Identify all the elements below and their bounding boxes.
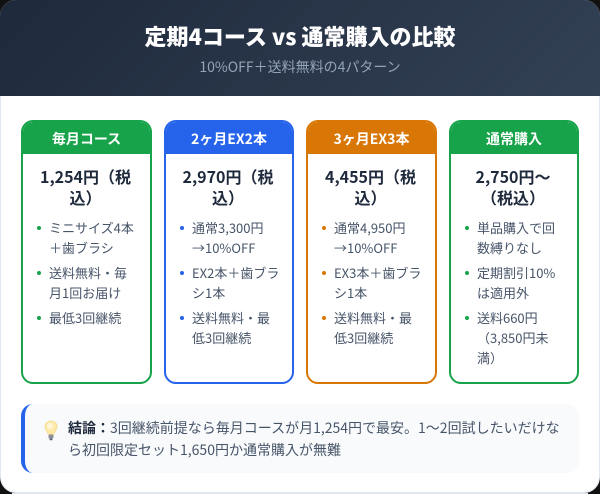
card header: 2ヶ月EX2本 xyxy=(166,122,292,154)
feature list: 送料660円 xyxy=(477,308,538,327)
feature list: シ1本 xyxy=(334,283,367,302)
feature list: 満） xyxy=(477,348,503,367)
card header: 2ヶ月EX2本: 2ヶ月EX2本 xyxy=(191,129,267,149)
conclusion text xyxy=(68,418,560,460)
price xyxy=(476,164,550,209)
price: 込） xyxy=(69,185,102,209)
subtitle: 10%OFF＋送料無料の4パターン xyxy=(199,57,401,77)
card header: 3ヶ月EX3本 xyxy=(308,122,435,154)
feature list: 数縛りなし xyxy=(477,238,542,257)
title: 定期4コース vs 通常購入の比較 xyxy=(145,20,455,52)
price xyxy=(325,164,416,209)
panel: 通常購入 xyxy=(449,120,579,384)
card header: 毎月コース: 毎月コース xyxy=(52,129,121,149)
card header: 3ヶ月EX3本: 3ヶ月EX3本 xyxy=(334,129,409,149)
feature list: （3,850円未 xyxy=(477,328,548,347)
feature list: 低3回継続 xyxy=(192,328,251,347)
feature list: 最低3回継続 xyxy=(49,308,121,327)
price: 2,750円〜 xyxy=(476,164,550,188)
feature list: 単品購入で回 xyxy=(477,218,555,237)
feature list xyxy=(465,218,555,367)
card header: 毎月コース xyxy=(23,122,150,154)
feature list xyxy=(322,218,421,347)
card header: 通常購入: 通常購入 xyxy=(486,129,542,149)
feature list: ミニサイズ4本 xyxy=(49,218,134,237)
icon: light bulb xyxy=(44,420,58,440)
feature list: シ1本 xyxy=(192,283,225,302)
conclusion text: ら初回限定セット1,650円か通常購入が無難 xyxy=(68,440,341,460)
panel: 3ヶ月EX3本 xyxy=(306,120,437,384)
panel: 2ヶ月EX2本 xyxy=(164,120,294,384)
feature list: 通常4,950円 xyxy=(334,218,405,237)
feature list: ＋歯ブラシ xyxy=(49,238,114,257)
feature list xyxy=(37,218,134,327)
feature list: 送料無料・最 xyxy=(334,308,412,327)
feature list: 低3回継続 xyxy=(334,328,393,347)
price: 2,970円（税 xyxy=(183,164,273,188)
price: 込） xyxy=(354,185,386,209)
feature list: は適用外 xyxy=(477,283,529,302)
feature list: 通常3,300円 xyxy=(192,218,263,237)
feature list xyxy=(180,218,279,347)
price: 4,455円（税 xyxy=(325,164,416,188)
feature list: →10%OFF xyxy=(192,238,255,257)
callout: conclusion xyxy=(21,404,579,473)
feature list: 月1回お届け xyxy=(49,283,121,302)
feature list: 送料無料・毎 xyxy=(49,263,127,282)
price: 1,254円（税 xyxy=(40,164,131,188)
price: 込） xyxy=(212,185,244,209)
card header: 通常購入 xyxy=(451,122,577,154)
conclusion text: 結論：3回継続前提なら毎月コースが月1,254円で最安。1〜2回試したいだけな xyxy=(68,418,560,438)
price xyxy=(40,164,131,209)
feature list: 定期割引10% xyxy=(477,263,555,282)
panel: 毎月コース xyxy=(21,120,152,384)
price: （税込） xyxy=(481,185,545,209)
feature list: →10%OFF xyxy=(334,238,397,257)
feature list: 送料無料・最 xyxy=(192,308,270,327)
feature list: EX2本＋歯ブラ xyxy=(192,263,279,282)
header band xyxy=(0,0,600,96)
feature list: EX3本＋歯ブラ xyxy=(334,263,421,282)
price xyxy=(183,164,274,209)
